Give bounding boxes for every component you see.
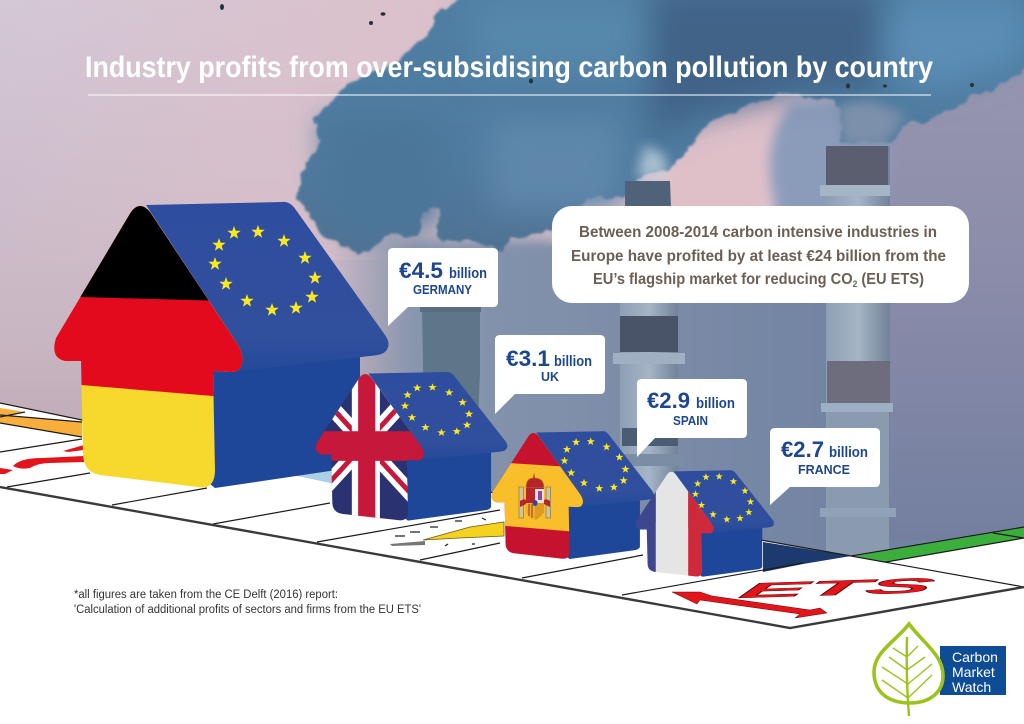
ETS label on board: ETS bbox=[734, 574, 939, 603]
board cell: green bbox=[855, 527, 1024, 562]
house: UK bbox=[308, 366, 507, 522]
callout: EU ETS summary: Between 2008-2014 carbon intensive industries in bbox=[579, 224, 937, 241]
smoke shading bbox=[320, 0, 1024, 230]
logo: Carbon Market Watch: Watch bbox=[952, 679, 991, 695]
callout: EU ETS summary: (EU ETS) bbox=[857, 271, 924, 288]
icon: Spanish coat of arms bbox=[519, 473, 550, 520]
board cell: light blue bbox=[293, 467, 340, 488]
house: Spain bbox=[485, 426, 654, 560]
bubble: Spain bbox=[637, 379, 747, 457]
bubble: Spain: SPAIN bbox=[673, 413, 708, 428]
bubble: UK: UK bbox=[541, 369, 560, 384]
background photo: sky with smoke and chimneys bbox=[0, 0, 1024, 566]
smoke plumes bbox=[295, 0, 1024, 257]
callout: EU ETS summary: Europe have profited by at least €24 billion from the bbox=[571, 248, 946, 265]
board cell: navy bbox=[763, 542, 851, 572]
footnote bbox=[74, 589, 421, 616]
bubble: Spain: €2.9 bbox=[647, 388, 690, 413]
callout: EU ETS summary: 2 bbox=[853, 279, 857, 289]
bubble: France: €2.7 bbox=[781, 437, 824, 462]
chimney: right bbox=[820, 146, 896, 566]
callout: EU ETS summary bbox=[552, 206, 969, 303]
bubble: France: billion bbox=[829, 444, 868, 461]
bubble: Spain: billion bbox=[696, 395, 735, 412]
game board bbox=[0, 403, 1024, 724]
bubble: Germany: GERMANY bbox=[413, 282, 472, 297]
logo: Carbon Market Watch: Market bbox=[952, 664, 995, 680]
callout: EU ETS summary: EU’s flagship market for reducing CO bbox=[593, 271, 868, 288]
bubble: France: FRANCE bbox=[798, 462, 850, 477]
red arrow on board bbox=[672, 592, 827, 618]
chimney: left bbox=[420, 306, 481, 420]
chimney: middle bbox=[613, 181, 685, 497]
birds bbox=[220, 4, 974, 88]
bubble: Germany bbox=[388, 248, 498, 326]
house: France bbox=[630, 466, 774, 577]
bubble: France bbox=[770, 428, 880, 505]
logo: Carbon Market Watch: Carbon bbox=[952, 649, 998, 665]
title: Industry profits from over-subsidising carbon pollution by country bbox=[85, 51, 933, 84]
bubble: UK bbox=[495, 335, 605, 414]
bubble: Germany: billion bbox=[449, 265, 487, 282]
board cell: orange bbox=[0, 415, 82, 437]
footnote: 'Calculation of additional profits of sectors and firms from the EU ETS' bbox=[74, 604, 421, 616]
bubble: Germany: €4.5 bbox=[399, 258, 443, 283]
bubble: UK: €3.1 bbox=[506, 346, 550, 371]
logo: Carbon Market Watch bbox=[874, 624, 1006, 716]
board text fragment: red squiggle bbox=[0, 445, 84, 474]
footnote: *all figures are taken from the CE Delft (2016) report: bbox=[74, 589, 338, 601]
icon: yellow quill on board bbox=[390, 518, 504, 546]
bubble: UK: billion bbox=[554, 353, 592, 370]
icon: leaf bbox=[874, 624, 943, 716]
house: Germany bbox=[40, 190, 388, 490]
